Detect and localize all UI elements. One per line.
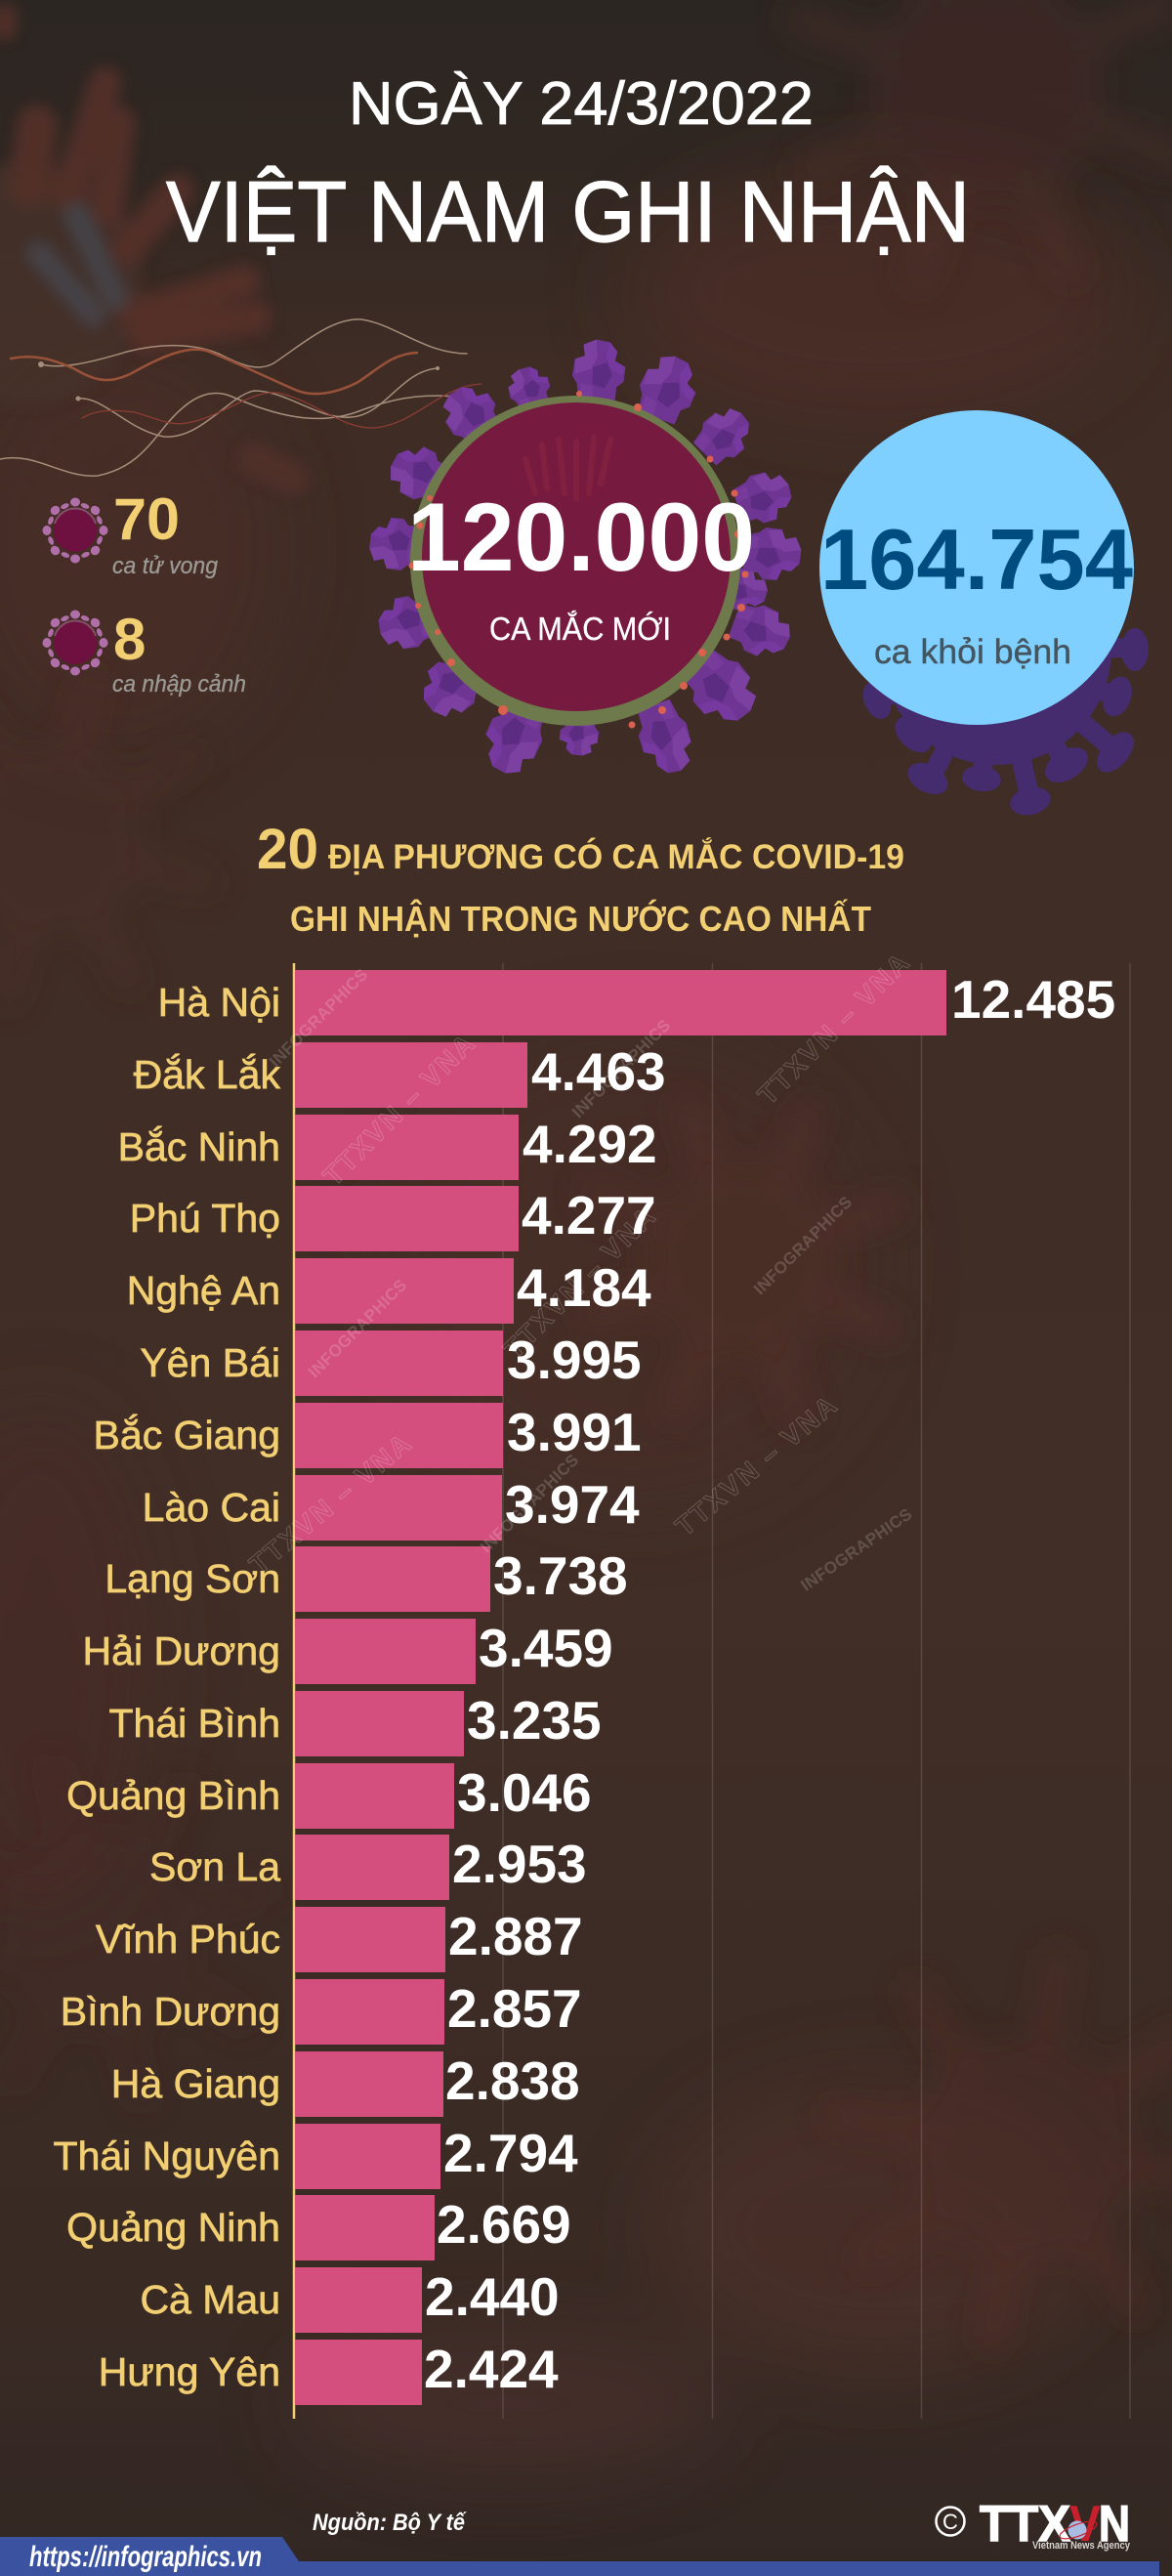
watermarks: TTXVN – VNA xyxy=(498,1202,661,1365)
logo: TTXVN: V xyxy=(1069,2496,1101,2553)
bar: Sơn La xyxy=(149,1834,587,1900)
number: new cases: 120.000 xyxy=(407,483,755,591)
bar: Bắc Ninh: 4.292 xyxy=(523,1114,657,1174)
bar: Phú Thọ: 4.277 xyxy=(522,1185,656,1246)
icon: small virus xyxy=(43,498,107,563)
watermarks: TTXVN – VNA xyxy=(243,1428,416,1580)
bar: Thái Bình: 3.235 xyxy=(467,1690,602,1751)
bar: Sơn La: Sơn La xyxy=(149,1844,280,1889)
bar: Cà Mau xyxy=(140,2266,560,2333)
bar: Vĩnh Phúc: 2.887 xyxy=(448,1906,583,1966)
bar: Hưng Yên: 2.424 xyxy=(424,2339,559,2399)
label: new cases: CA MẮC MỚI xyxy=(489,611,671,647)
title: date: NGÀY 24/3/2022 xyxy=(349,70,814,138)
logo: TTXVN: TTX xyxy=(980,2496,1070,2553)
bar: Hà Giang: 2.838 xyxy=(445,2050,580,2111)
label: deaths: ca tử vong xyxy=(112,553,219,579)
bar: Quảng Bình: Quảng Bình xyxy=(66,1773,280,1818)
bar: Lạng Sơn xyxy=(105,1545,628,1612)
bar: Yên Bái xyxy=(140,1330,642,1396)
bar: Thái Nguyên xyxy=(54,2123,578,2189)
chart heading: ĐỊA PHƯƠNG CÓ CA MẮC COVID-19 xyxy=(328,837,904,876)
chart heading: GHI NHẬN TRONG NƯỚC CAO NHẤT xyxy=(290,898,871,939)
bar: Lạng Sơn: Lạng Sơn xyxy=(105,1556,280,1601)
watermarks: TTXVN – VNA xyxy=(669,1390,842,1541)
logo: TTXVN: Vietnam News Agency xyxy=(1032,2540,1131,2552)
bar chart xyxy=(54,963,1130,2419)
bar: Lào Cai xyxy=(143,1474,640,1541)
bar: Cà Mau: Cà Mau xyxy=(140,2277,280,2322)
bar: Nghệ An xyxy=(127,1257,651,1324)
number: 70 deaths: 70 xyxy=(113,486,180,552)
bar: Hà Nội xyxy=(158,969,1115,1035)
logo: TTXVN: N xyxy=(1099,2496,1130,2553)
bar: Bắc Giang: 3.991 xyxy=(507,1402,642,1462)
stat: imported cases xyxy=(43,607,246,697)
bar: Hà Nội: Hà Nội xyxy=(158,980,280,1025)
watermarks: INFOGRAPHICS xyxy=(750,1193,856,1298)
chart heading xyxy=(257,818,904,939)
label: imported: ca nhập cảnh xyxy=(112,671,246,697)
bar: Vĩnh Phúc xyxy=(96,1906,583,1972)
number: recovered: 164.754 xyxy=(820,511,1133,608)
bar: Yên Bái: 3.995 xyxy=(507,1330,642,1390)
bar: Hải Dương: 3.459 xyxy=(479,1618,613,1678)
bar: Quảng Ninh: Quảng Ninh xyxy=(66,2205,280,2250)
watermarks xyxy=(243,948,915,1595)
bar: Đắk Lắk xyxy=(134,1041,666,1108)
bar: Lào Cai: 3.974 xyxy=(505,1474,640,1535)
watermarks: INFOGRAPHICS xyxy=(266,965,371,1071)
bar: Thái Bình: Thái Bình xyxy=(109,1701,280,1746)
footer bar xyxy=(0,2537,1159,2576)
bar: Hà Nội: 12.485 xyxy=(951,969,1115,1030)
virus: new cases xyxy=(369,338,801,781)
label: recovered: ca khỏi bệnh xyxy=(874,633,1071,671)
bar: Quảng Bình: 3.046 xyxy=(457,1762,592,1823)
bar: Quảng Ninh xyxy=(66,2194,571,2260)
bar: Phú Thọ xyxy=(130,1185,656,1251)
watermarks: INFOGRAPHICS xyxy=(305,1276,410,1381)
bar: Nghệ An: Nghệ An xyxy=(127,1268,280,1313)
watermarks: TTXVN – VNA xyxy=(317,1029,481,1192)
bar: Hải Dương xyxy=(83,1618,613,1684)
bar: Hà Giang xyxy=(111,2050,580,2117)
source: Nguồn: Bộ Y tế xyxy=(313,2510,467,2536)
bar: Thái Nguyên: Thái Nguyên xyxy=(54,2133,280,2178)
stat: deaths xyxy=(43,486,219,579)
bar: Đắk Lắk: 4.463 xyxy=(531,1041,666,1102)
bar: Vĩnh Phúc: Vĩnh Phúc xyxy=(96,1917,280,1962)
bar: Hải Dương: Hải Dương xyxy=(83,1628,280,1673)
bar: Hà Giang: Hà Giang xyxy=(111,2061,280,2106)
bar: Sơn La: 2.953 xyxy=(452,1834,587,1894)
bar: Cà Mau: 2.440 xyxy=(425,2266,560,2327)
bar: Bình Dương: 2.857 xyxy=(447,1978,582,2039)
number: 8 imported: 8 xyxy=(113,607,146,672)
icon: small virus xyxy=(43,610,107,676)
bar: Yên Bái: Yên Bái xyxy=(140,1340,280,1385)
bar: Thái Nguyên: 2.794 xyxy=(443,2123,578,2183)
bar: Quảng Ninh: 2.669 xyxy=(437,2194,571,2255)
bar: Bắc Giang: Bắc Giang xyxy=(94,1413,280,1457)
bar: Bình Dương xyxy=(61,1978,582,2045)
watermarks: INFOGRAPHICS xyxy=(568,1016,674,1121)
circle: recovered xyxy=(819,410,1134,725)
bar: Phú Thọ: Phú Thọ xyxy=(130,1196,280,1241)
watermarks: INFOGRAPHICS xyxy=(477,1451,582,1556)
bar: Hưng Yên: Hưng Yên xyxy=(99,2349,280,2394)
footer url: https://infographics.vn xyxy=(29,2541,262,2573)
bar: Hưng Yên xyxy=(99,2339,559,2405)
watermarks: INFOGRAPHICS xyxy=(798,1504,915,1595)
bar: Nghệ An: 4.184 xyxy=(517,1257,651,1318)
bar: Thái Bình xyxy=(109,1690,602,1756)
watermarks: TTXVN – VNA xyxy=(752,948,915,1111)
logo: TTXVN xyxy=(936,2496,1131,2553)
decorative waves xyxy=(0,319,481,476)
bar: Bắc Giang xyxy=(94,1402,642,1468)
bar: Lào Cai: Lào Cai xyxy=(143,1485,280,1530)
bar: Đắk Lắk: Đắk Lắk xyxy=(134,1052,280,1097)
bar: Lạng Sơn: 3.738 xyxy=(493,1545,628,1606)
chart heading: 20 xyxy=(257,818,318,881)
bar: Bình Dương: Bình Dương xyxy=(61,1989,280,2034)
virus: recovered silhouette xyxy=(858,534,1149,819)
bar: Bắc Ninh: Bắc Ninh xyxy=(118,1124,280,1169)
title: main heading: VIỆT NAM GHI NHẬN xyxy=(166,163,970,260)
logo: TTXVN: C xyxy=(942,2510,958,2534)
bar: Bắc Ninh xyxy=(118,1114,657,1180)
bar: Quảng Bình xyxy=(66,1762,592,1829)
